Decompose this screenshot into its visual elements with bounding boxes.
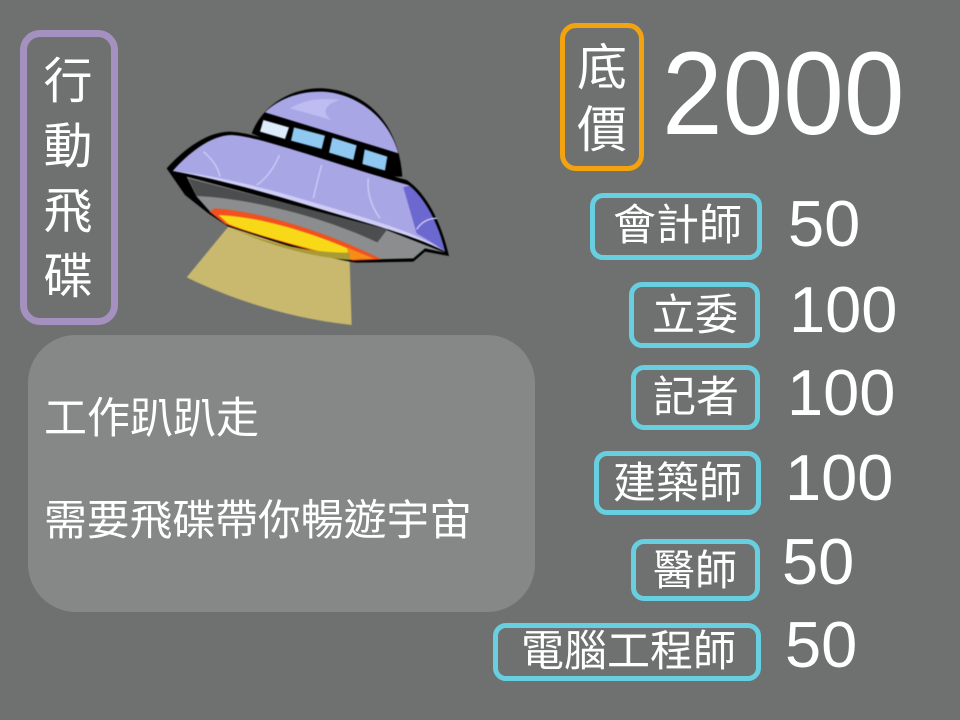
- panel lines: [203, 152, 437, 229]
- engine orange tip: [347, 247, 374, 259]
- number: base price value: 2000: [662, 28, 904, 160]
- number: 醫師 value: 50: [782, 525, 854, 598]
- label text: 會計師: [613, 202, 742, 250]
- number: 會計師 value: 50: [788, 187, 860, 260]
- label: base price: [560, 23, 644, 171]
- dark band: [188, 178, 387, 242]
- dome outline: [252, 88, 402, 177]
- dome highlight: [290, 99, 340, 120]
- blue side panel: [403, 186, 445, 252]
- label text: 建築師: [613, 460, 742, 508]
- text: line 2: 需要飛碟帶你暢遊宇宙: [44, 497, 472, 545]
- dome: [265, 92, 398, 153]
- icon: flying saucer: [166, 88, 450, 326]
- row: 建築師: [594, 451, 761, 515]
- label text: 電腦工程師: [521, 628, 736, 676]
- vertical text: 底價: 底價: [577, 40, 627, 158]
- beam shadow on engine: [228, 227, 350, 260]
- number: 記者 value: 100: [787, 356, 895, 429]
- rim highlight: [173, 171, 445, 252]
- panel: description: [28, 335, 535, 612]
- label text: 立委: [652, 292, 738, 340]
- underside: [187, 177, 445, 259]
- label: product type 行動飛碟: [20, 30, 118, 325]
- engine glow: [209, 208, 382, 261]
- hull outline: [167, 132, 449, 263]
- row: 記者: [631, 365, 760, 430]
- label text: 記者: [653, 374, 739, 422]
- windows: [260, 120, 387, 171]
- row: 醫師: [631, 539, 760, 601]
- number: 建築師 value: 100: [785, 441, 893, 514]
- label text: 醫師: [653, 547, 737, 594]
- saucer top: [173, 135, 445, 252]
- row: 會計師: [590, 193, 762, 260]
- text: line 1: 工作趴趴走: [44, 395, 259, 443]
- vertical text: 行動飛碟: 行動飛碟: [43, 55, 92, 304]
- engine yellow: [218, 215, 370, 259]
- row: 電腦工程師: [493, 623, 761, 681]
- beam: [187, 227, 352, 325]
- row: 立委: [629, 282, 760, 348]
- number: 電腦工程師 value: 50: [785, 608, 857, 681]
- number: 立委 value: 100: [789, 273, 897, 346]
